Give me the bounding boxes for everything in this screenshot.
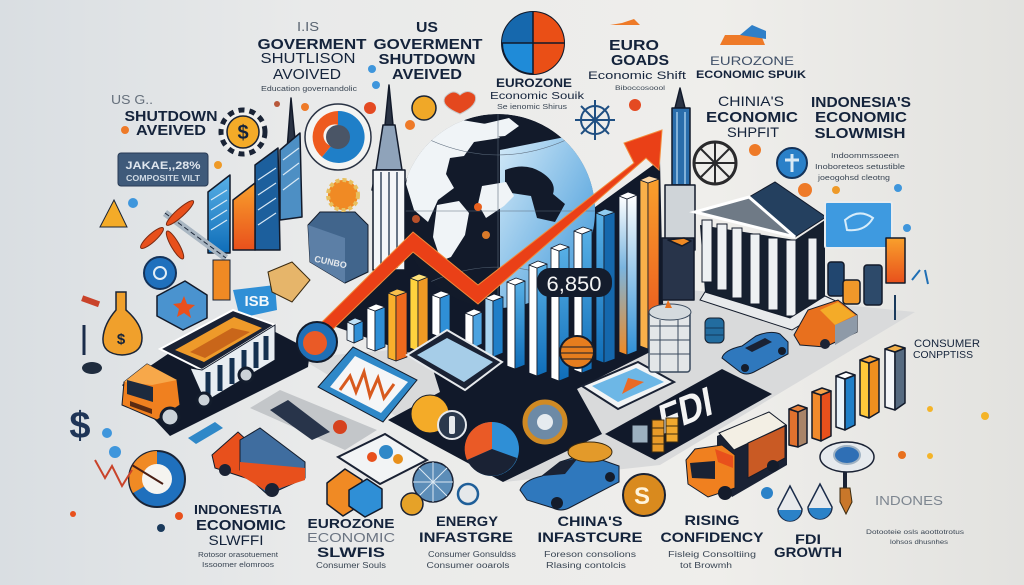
heading: Euro goads: Economic Shift (588, 70, 686, 82)
trend arrow (322, 130, 662, 332)
heading: Eurozone under pie (490, 76, 585, 111)
heading: Eurozone under pie: Economic Souik (490, 91, 585, 102)
heading: US government shutdown avoided, right (374, 19, 482, 83)
label: Indones: INDONES (875, 493, 943, 508)
heading: China's economic shift (706, 93, 798, 140)
heading: US government shutdown avoided, left: Education governandolic (261, 86, 358, 93)
caption: energy infrastructure (419, 513, 516, 570)
heading: China's economic shift: CHINIA'S (718, 93, 784, 109)
heading: US government shutdown avoided, left (258, 19, 366, 93)
warning triangle (100, 200, 127, 227)
blue globe button (777, 148, 807, 178)
monitor (825, 202, 892, 248)
platform: dark centre plate (322, 160, 664, 482)
caption: Eurozone economic (307, 516, 395, 570)
label: Indones (866, 493, 964, 546)
right cylinders and bar (828, 238, 905, 305)
caption: energy infrastructure: Consumer Gonsuldss (428, 550, 516, 559)
centre bar chart (347, 176, 659, 381)
data canister (649, 300, 691, 372)
S coin: S (634, 483, 650, 510)
platform: light grey isometric floor (300, 290, 915, 482)
caption: rising confidency: CONFIDENCY (660, 529, 764, 545)
heading: Indonesia's economic slowdown: joeogohsd cleotng (817, 175, 890, 182)
caption: energy infrastructure: INFASTGRE (419, 529, 513, 545)
scattered confetti dots (70, 19, 989, 532)
label: consumer: CONSUMER (914, 338, 980, 350)
small coin and heart (412, 92, 476, 120)
top pie chart (502, 12, 564, 74)
line chart screen (318, 347, 417, 422)
heading: Indonesia's economic slowdown: Inoboreteos setustible (815, 164, 905, 171)
caption: Eurozone economic: SLWFIS (317, 544, 385, 560)
heading: US government shutdown avoided, left: SHUTLISON (260, 50, 356, 67)
caption: Indonesia economic (194, 502, 286, 569)
tablet with coins (338, 434, 427, 484)
callout: Jakarta composite (118, 153, 208, 186)
caption: Indonesia economic: INDONESTIA (194, 502, 283, 517)
heading: Indonesia's economic slowdown: Indoommssoeen (831, 153, 899, 160)
left glass towers (208, 98, 302, 253)
platform: FDI band (605, 369, 772, 460)
caption: rising confidency: Fisleig Consoltiing (668, 550, 756, 559)
blue ISB sign (233, 262, 310, 318)
caption: Indonesia economic: Rotosor orasotuement (198, 552, 278, 559)
heading: shutdown averted, far left: SHUTDOWN (124, 108, 218, 125)
right tower (662, 88, 695, 300)
blue cylinder (705, 318, 724, 343)
caption: China's infrastructure: Foreson consolions (544, 550, 636, 559)
blue circle (144, 257, 176, 289)
heading: China's economic shift: SHPFIT (727, 124, 779, 140)
heading: Eurozone economic shuik: ECONOMIC SPUIK (696, 69, 806, 81)
second truck (686, 412, 787, 500)
globe (406, 114, 595, 308)
ship wheels (575, 100, 736, 184)
sphere and dial (411, 395, 466, 439)
money flask: $ (117, 331, 126, 348)
value pill (537, 268, 612, 297)
heading: US government shutdown avoided, left: GOVERMENT (258, 36, 366, 53)
heading: Indonesia's economic slowdown: ECONOMIC (815, 109, 907, 126)
caption: Eurozone economic: EUROZONE (308, 516, 395, 531)
caption: Indonesia economic: ECONOMIC (196, 517, 286, 534)
bronze coin ring (525, 402, 565, 442)
main truck (122, 310, 275, 426)
gauge (129, 451, 185, 507)
label: Indones: lohsos dhusnhes (890, 540, 948, 546)
map card (582, 362, 674, 409)
heading: Indonesia's economic slowdown (811, 94, 911, 182)
heading: US government shutdown avoided, right: AVEIVED (392, 66, 462, 83)
heading: Eurozone economic shuik (696, 54, 806, 81)
heading: Indonesia's economic slowdown: SLOWMISH (814, 125, 906, 142)
round orange badge (297, 322, 337, 362)
caption: Indonesia economic: SLWFFI (208, 532, 264, 548)
water drop scales (761, 484, 832, 521)
callout: Jakarta composite: COMPOSITE VILT (126, 174, 200, 183)
left skyscraper (372, 85, 406, 270)
platform: dark truck band (122, 310, 310, 436)
heading: US government shutdown avoided, left: I.IS (297, 19, 319, 34)
caption: Eurozone economic: ECONOMIC (307, 530, 395, 545)
heading: Eurozone under pie: Se ienomic Shirus (497, 104, 568, 111)
caption: China's infrastructure (538, 513, 642, 570)
heading: US government shutdown avoided, right: SHUTDOWN (378, 51, 476, 68)
caption: China's infrastructure: INFASTCURE (538, 529, 642, 545)
red van (212, 428, 305, 497)
S coin (623, 474, 665, 516)
orange and blue cubes (327, 469, 382, 517)
heading: US government shutdown avoided, right: US (416, 19, 438, 36)
small blue car (722, 332, 788, 374)
caption: FDI growth: GROWTH (774, 544, 842, 560)
tablet (407, 330, 502, 390)
label: Indones: Dotooteie osls aoottotrotus (866, 530, 964, 536)
dollar gear (221, 110, 265, 154)
heading: shutdown averted, far left: AVEIVED (136, 122, 206, 139)
dollar sign and red zigzag: $ (69, 405, 91, 447)
heading: Eurozone economic shuik: EUROZONE (710, 54, 794, 68)
bank building (695, 182, 838, 330)
caption: energy infrastructure: Consumer ooarols (426, 561, 510, 570)
caption: FDI growth: FDI (795, 531, 821, 547)
blue cube with star (157, 281, 207, 330)
caption: rising confidency: tot Browmh (680, 561, 732, 570)
heading: shutdown averted, far left: US G.. (111, 92, 153, 107)
value pill: 6,850 (546, 273, 602, 296)
dark block building and gear: CUNBO (313, 254, 348, 270)
blue pickup (520, 442, 619, 510)
caption: rising confidency: RISING (684, 512, 740, 528)
heading: Eurozone under pie: EUROZONE (496, 76, 572, 90)
caption: rising confidency (660, 512, 764, 570)
caption: China's infrastructure: Rlasing contolcis (546, 561, 626, 570)
caption: Indonesia economic: Issoomer elomroos (202, 562, 275, 569)
heading: Indonesia's economic slowdown: INDONESIA'S (811, 94, 911, 111)
heading: Euro goads: EURO (609, 37, 659, 54)
heading: shutdown averted, far left (111, 92, 218, 139)
caption: energy infrastructure: ENERGY (436, 513, 499, 529)
coin stack (560, 336, 594, 368)
right rising bars (789, 345, 905, 447)
label: consumer: CONPPTISS (913, 350, 973, 361)
crane (138, 198, 230, 300)
gear and brush (820, 442, 874, 514)
orange van upper (794, 300, 857, 349)
network globe and coins (401, 462, 478, 515)
heading: Euro goads (588, 37, 686, 92)
heading: China's economic shift: ECONOMIC (706, 109, 798, 126)
heading: Euro goads: GOADS (611, 52, 669, 69)
heading: US government shutdown avoided, right: GOVERMENT (374, 36, 482, 53)
FDI label: FDI (656, 377, 716, 443)
coin pile on FDI band (632, 418, 678, 452)
money flask (103, 292, 142, 355)
dark block building and gear (308, 180, 368, 283)
caption: China's infrastructure: CHINA'S (558, 513, 622, 529)
dollar sign and red zigzag (69, 405, 132, 486)
heading: US government shutdown avoided, left: AVOIVED (273, 66, 341, 83)
concentric target chart (305, 104, 371, 170)
device strip (188, 390, 377, 450)
caption: Eurozone economic: Consumer Souls (316, 561, 386, 570)
heading: Euro goads: Biboccosoool (615, 86, 665, 92)
caption: FDI growth (774, 531, 842, 560)
dollar gear: $ (237, 122, 249, 144)
blue ISB sign: ISB (244, 293, 270, 310)
callout: Jakarta composite: JAKAE,,28% (126, 160, 201, 172)
lower pie chart (465, 422, 519, 476)
label: consumer (913, 338, 980, 361)
